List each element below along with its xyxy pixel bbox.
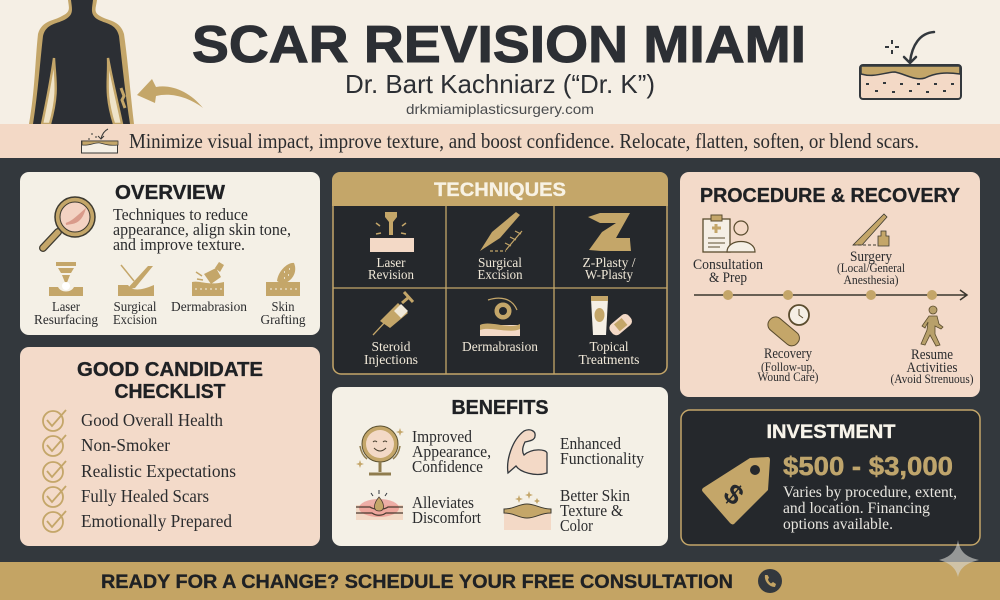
panel: techniques (332, 172, 668, 374)
icon: dermabrasion wheel (480, 298, 520, 336)
surgery label: Anesthesia) (844, 273, 898, 287)
icon: surgical excision (118, 265, 154, 296)
technique labels: Injections (364, 353, 418, 368)
heading: overview: OVERVIEW (115, 182, 225, 204)
icon: skin grafting (266, 263, 300, 296)
technique labels: Dermabrasion (462, 340, 538, 355)
tagline text: Minimize visual impact, improve texture, and boost confidence. Relocate, flatten, soften, or blend scars. (129, 129, 919, 153)
benefit labels: Functionality (560, 449, 645, 468)
price: $500 - $3,000 (783, 451, 953, 481)
timeline dots (723, 290, 937, 300)
overview text (113, 205, 291, 254)
panel: good candidate checklist (20, 347, 320, 546)
investment text: and location. Financing (783, 500, 930, 517)
heading: checklist: GOOD CANDIDATE (77, 359, 263, 381)
icon: laser revision (370, 212, 414, 252)
technique labels: Z-Plasty / (582, 256, 636, 271)
recovery label: (Follow-up, (761, 360, 815, 374)
technique labels: Steroid (372, 340, 410, 355)
resume label: Activities (906, 360, 958, 376)
checklist items: Fully Healed Scars (81, 486, 209, 506)
recovery label (758, 346, 818, 384)
checklist items (81, 410, 236, 531)
heading: benefits: BENEFITS (452, 397, 548, 419)
benefit labels: Enhanced (560, 434, 622, 453)
icon: small skin layers (82, 129, 118, 153)
benefit labels: Discomfort (412, 508, 481, 527)
timeline arrow (694, 290, 967, 300)
recovery label: Wound Care) (758, 370, 818, 384)
benefit labels: Confidence (412, 457, 483, 476)
checklist items: Emotionally Prepared (81, 511, 232, 531)
recovery label: Recovery (764, 346, 813, 362)
technique labels: W-Plasty (585, 268, 633, 283)
technique labels (364, 256, 640, 368)
investment text: Varies by procedure, extent, (783, 484, 957, 501)
icon: phone (758, 569, 782, 593)
benefit labels: Better Skin (560, 486, 630, 505)
overview text: and improve texture. (113, 235, 245, 254)
benefit labels: Color (560, 516, 593, 535)
technique labels: Laser (376, 256, 406, 271)
overview text: appearance, align skin tone, (113, 220, 291, 239)
benefit labels: Texture & (560, 501, 623, 520)
panel: overview (20, 172, 320, 335)
icon: topical tube and bandage (591, 296, 634, 337)
overview text: Techniques to reduce (113, 205, 248, 224)
techniques header bar (332, 172, 668, 206)
icon: better skin texture (504, 491, 551, 530)
icon: magnifying glass (43, 197, 95, 248)
icon: laser resurfacing (49, 262, 83, 296)
consultation label (693, 257, 764, 286)
benefit labels: Improved (412, 427, 473, 446)
arrow: pointing to scar (137, 79, 203, 108)
overview labels: Resurfacing (34, 312, 98, 327)
heading: techniques: TECHNIQUES (434, 180, 566, 201)
resume label: Resume (911, 347, 953, 363)
overview labels (34, 299, 306, 327)
checklist items: Realistic Expectations (81, 461, 236, 481)
heading: procedure and recovery: PROCEDURE & RECOVERY (700, 185, 961, 207)
icon: scalpel (480, 212, 522, 251)
heading: checklist: CHECKLIST (114, 381, 226, 403)
icon: bandage and clock (765, 305, 809, 349)
icon: steroid syringe (373, 292, 413, 335)
icon: skin layers with arrow (860, 32, 961, 99)
title: SCAR REVISION MIAMI (192, 16, 806, 74)
technique labels: Surgical (478, 256, 522, 271)
overview labels: Grafting (260, 312, 306, 327)
heading: checklist (77, 359, 263, 403)
checklist items: Non-Smoker (81, 435, 170, 455)
icon: price tag (702, 457, 770, 524)
surgery label: Surgery (850, 249, 893, 265)
icon: consultation (703, 215, 755, 252)
technique labels: Treatments (578, 353, 640, 368)
panel: investment (681, 410, 980, 545)
heading: investment: INVESTMENT (766, 422, 896, 443)
consultation label: Consultation (693, 257, 764, 273)
icon: surgery scalpel and vial (853, 214, 889, 246)
footer call to action (0, 562, 1000, 600)
investment text: options available. (783, 516, 893, 533)
technique labels: Topical (590, 340, 629, 355)
technique labels: Excision (478, 268, 522, 283)
icon: flexed arm (508, 430, 547, 474)
icon: body silhouette with scar (29, 0, 134, 124)
overview labels: Dermabrasion (171, 299, 247, 314)
panel: benefits (332, 387, 668, 546)
benefit labels (412, 427, 645, 535)
icon: alleviates discomfort (356, 490, 403, 520)
overview labels: Surgical (114, 299, 157, 314)
overview labels: Laser (52, 299, 80, 314)
resume label: (Avoid Strenuous) (890, 372, 974, 386)
icon: dermabrasion small (192, 262, 224, 296)
check icons (43, 410, 66, 532)
consultation label: & Prep (709, 270, 747, 286)
tagline band (0, 124, 1000, 158)
icon: price tag: $ (718, 478, 750, 512)
header (0, 0, 1000, 124)
icon: z-plasty (588, 213, 631, 251)
techniques grid lines (333, 205, 667, 374)
technique labels: Revision (368, 268, 414, 283)
website: drkmiamiplasticsurgery.com (406, 101, 594, 117)
checklist items: Good Overall Health (81, 410, 223, 430)
benefit labels: Appearance, (412, 442, 491, 461)
investment text (783, 484, 957, 533)
icon: walking person (921, 306, 943, 346)
overview labels: Excision (113, 312, 157, 327)
panel: procedure and recovery (680, 172, 980, 397)
resume label (890, 347, 974, 386)
benefit labels: Alleviates (412, 493, 474, 512)
icon: sparkle watermark (939, 540, 979, 577)
call to action text: READY FOR A CHANGE? SCHEDULE YOUR FREE CONSULTATION (101, 572, 733, 593)
surgery label: (Local/General (837, 261, 905, 275)
overview labels: Skin (272, 299, 295, 314)
subtitle: Dr. Bart Kachniarz (“Dr. K”) (345, 69, 655, 99)
icon: smiling mirror (356, 426, 404, 474)
surgery label (837, 249, 905, 287)
